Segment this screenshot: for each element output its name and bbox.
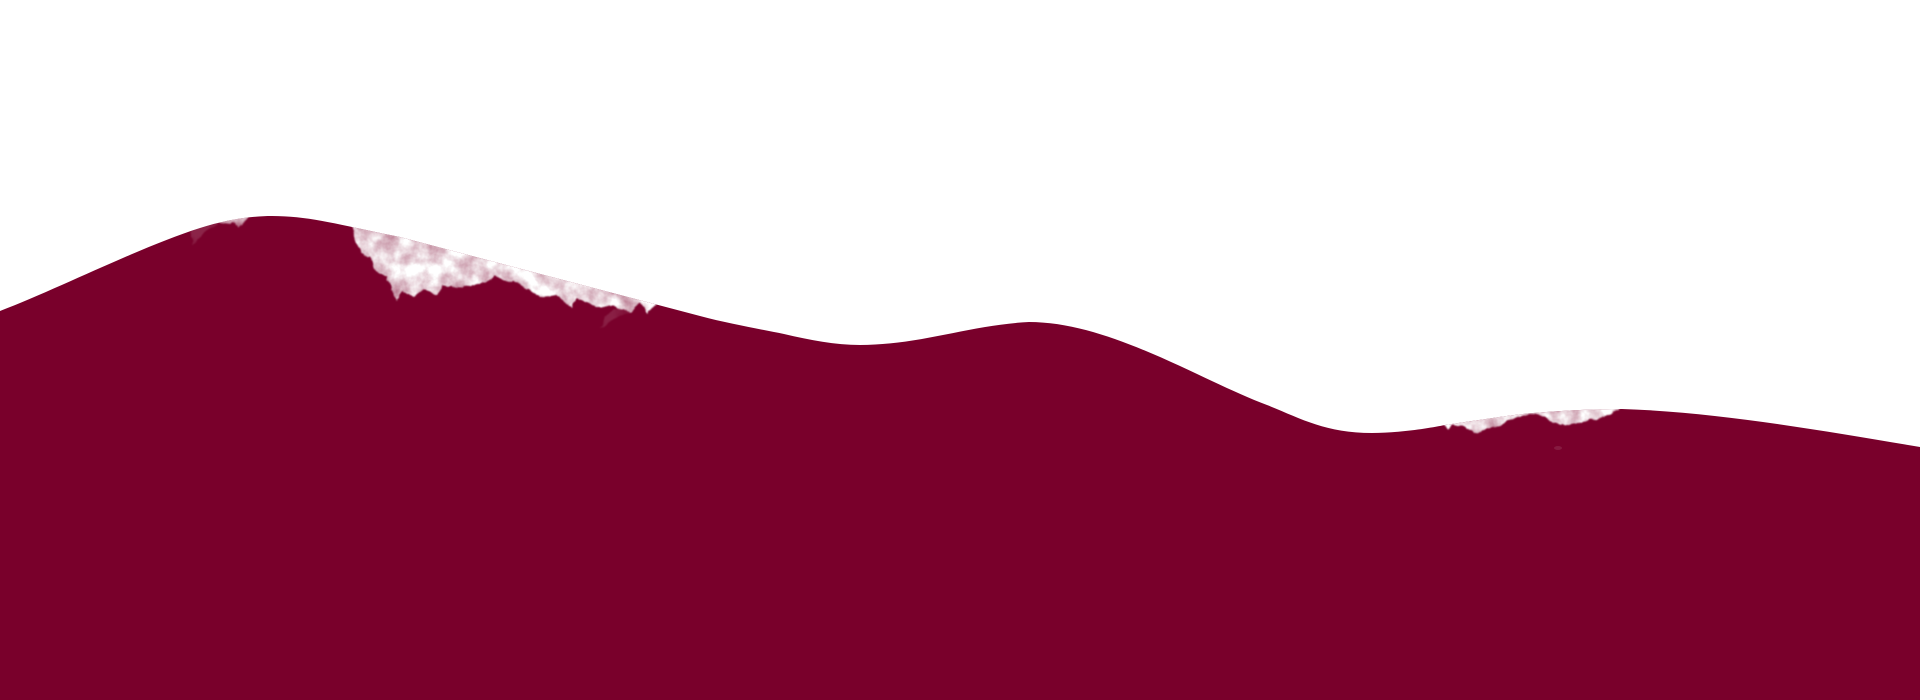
patch: large worn area on left slope [351, 227, 657, 314]
worn texture patches [190, 205, 1620, 450]
patch: worn area on right hill [1444, 409, 1620, 434]
patch: small worn area near summit [219, 218, 250, 228]
patch: faint worn area near summit [190, 223, 219, 244]
patch: faint spot on right hill [1554, 446, 1562, 450]
illustration: crimson hill silhouette [0, 216, 1920, 700]
hill shape [0, 216, 1920, 700]
patch: faint stain below left slope [601, 306, 636, 328]
